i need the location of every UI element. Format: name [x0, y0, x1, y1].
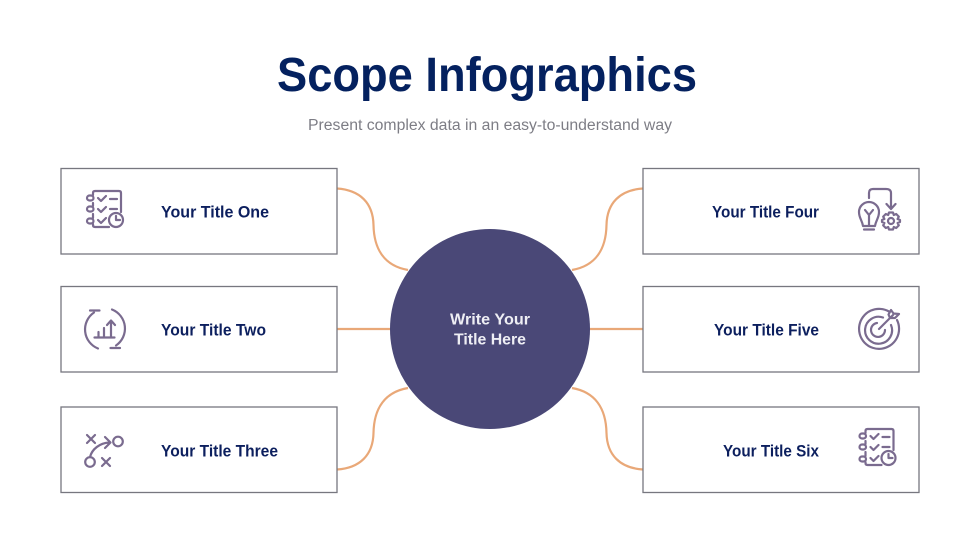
panel: title six: [643, 407, 919, 492]
central circle text: Title Here: [454, 332, 526, 348]
label: Your Title Two: [161, 322, 266, 340]
panel: title five: [643, 286, 919, 372]
label: Your Title Six: [723, 442, 820, 460]
panel: title one: [61, 168, 337, 254]
subtitle: Present complex data in an easy-to-understand way: [308, 117, 672, 134]
connector: middle left: [337, 328, 392, 330]
panel: title three: [61, 407, 337, 492]
label: Your Title One: [161, 204, 269, 222]
label: Your Title Three: [161, 442, 278, 460]
central circle: [390, 229, 590, 429]
icon: target: [859, 309, 899, 349]
panel: title four: [643, 168, 919, 254]
connector: top left: [337, 188, 408, 270]
icon: checklist with clock: [87, 191, 123, 227]
connector: bottom right: [572, 388, 643, 470]
icon: growth cycle: [85, 310, 125, 348]
title: Scope Infographics: [277, 49, 697, 102]
icon: idea to process: [859, 189, 900, 230]
panel: title two: [61, 286, 337, 372]
label: Your Title Four: [712, 204, 820, 222]
connector: middle right: [588, 328, 643, 330]
label: Your Title Five: [714, 322, 819, 340]
icon: strategy play: [85, 435, 123, 467]
central circle text: Write Your: [450, 312, 530, 328]
connector: top right: [572, 188, 643, 270]
icon: checklist with clock: [860, 429, 896, 465]
connector: bottom left: [337, 388, 408, 470]
